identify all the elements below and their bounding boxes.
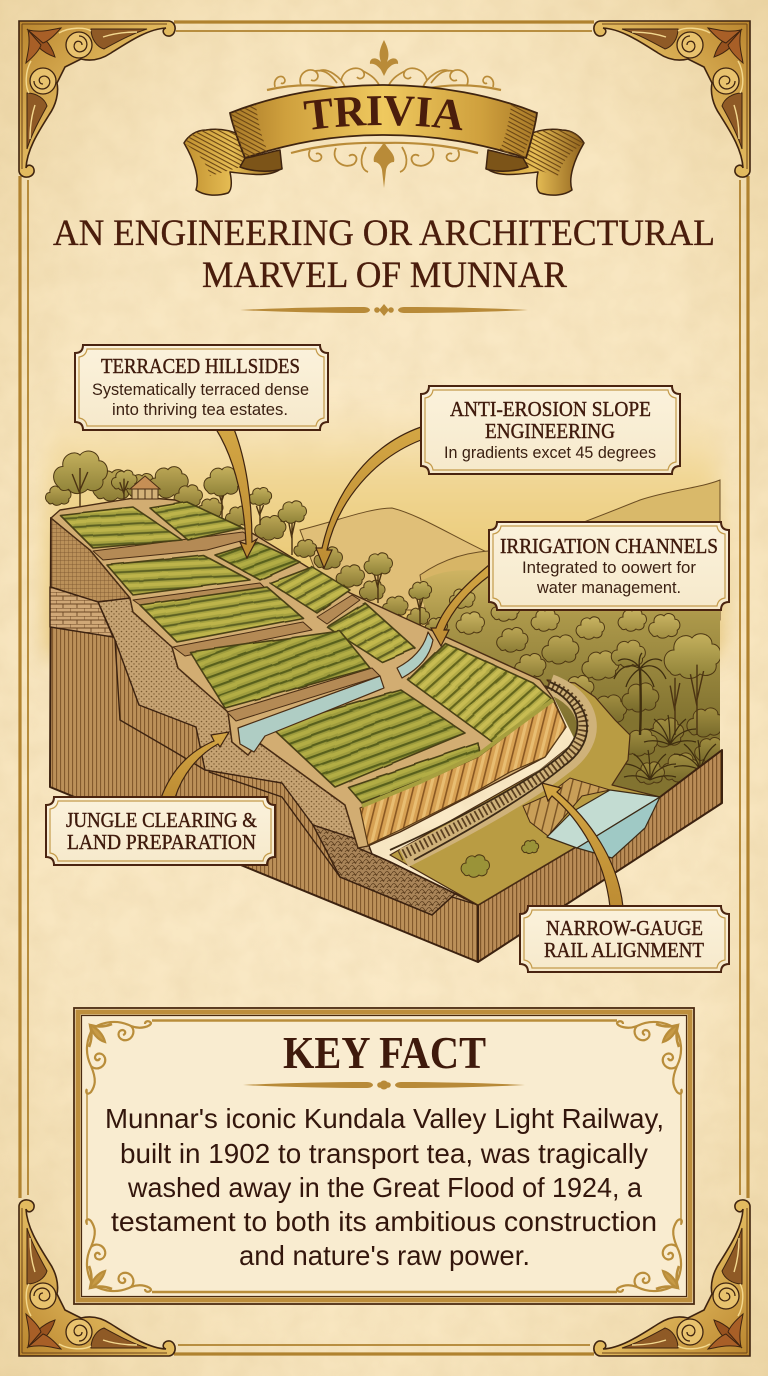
panel body text: washed away in the Great Flood of 1924, a: [127, 1172, 643, 1203]
arrow: to rail alignment: [542, 783, 623, 907]
soil layers: [50, 518, 478, 915]
panel divider: [243, 1080, 525, 1090]
left cut face of block: [50, 518, 478, 962]
pond bank: [523, 778, 610, 836]
callout: irrigation channels: water management.: [536, 578, 681, 597]
title: [53, 213, 715, 296]
callout: irrigation channels: IRRIGATION CHANNELS: [500, 534, 718, 558]
corner ornament: top right: [594, 21, 750, 177]
arrow: to irrigation channels: [431, 565, 489, 646]
callout: narrow-gauge rail alignment: [520, 906, 729, 972]
banner: TRIVIA ribbon: [183, 84, 585, 196]
flourish above banner: [267, 40, 501, 103]
callout: terraced hillsides: Systematically terraced dense: [92, 380, 309, 399]
title divider: [240, 304, 528, 316]
retaining walls: [93, 532, 380, 721]
callout: jungle clearing and land preparation: [46, 797, 275, 865]
sky: [48, 395, 720, 655]
panel body text: [105, 1103, 664, 1271]
callout: anti-erosion slope engineering: [421, 386, 680, 474]
callout: terraced hillsides: TERRACED HILLSIDES: [101, 354, 300, 378]
left ribbon tail: [184, 129, 282, 195]
corner ornament: top left: [19, 21, 175, 177]
hillside surface: [51, 497, 566, 848]
illustration: terraced hillside cross-section: [45, 395, 726, 962]
corner ornament: bottom right: [594, 1200, 750, 1356]
callout: narrow-gauge rail alignment: NARROW-GAUGE: [546, 916, 703, 940]
panel body text: testament to both its ambitious construction: [111, 1206, 657, 1237]
pond: [547, 790, 660, 858]
ridge canopy: [45, 451, 448, 635]
tall ridge trees: [217, 483, 227, 518]
title line 2: MARVEL OF MUNNAR: [202, 255, 567, 296]
distant hills: [300, 480, 720, 640]
narrow-gauge railway: [390, 682, 587, 860]
shrubs on front ground: [461, 840, 539, 877]
panel body text: Munnar's iconic Kundala Valley Light Railway,: [105, 1103, 664, 1134]
callout: anti-erosion slope engineering: ENGINEERING: [485, 419, 615, 443]
panel body text: built in 1902 to transport tea, was tragically: [120, 1138, 648, 1169]
callout: anti-erosion slope engineering: ANTI-EROSION SLOPE: [450, 397, 651, 421]
arrow: to jungle clearing: [161, 732, 229, 798]
panel body text: and nature's raw power.: [239, 1240, 530, 1271]
callout: narrow-gauge rail alignment: RAIL ALIGNMENT: [544, 938, 704, 962]
title line 1: AN ENGINEERING OR ARCHITECTURAL: [53, 213, 715, 254]
callout: irrigation channels: [489, 522, 729, 610]
arrow: to anti-erosion slope: [316, 427, 421, 568]
panel corner filigree: [86, 1021, 682, 1292]
callout: terraced hillsides: into thriving tea estates.: [112, 400, 288, 419]
hill bungalow: [130, 476, 160, 499]
ribbon band: [230, 85, 537, 158]
callout: anti-erosion slope engineering: In gradients excet 45 degrees: [444, 443, 656, 462]
corner ornament: bottom left: [19, 1200, 175, 1356]
panel: key fact: [74, 1008, 694, 1304]
front ground: [390, 680, 660, 905]
right cut face of block: [478, 750, 722, 962]
jungle valley: [415, 570, 726, 800]
eroded cliff: [360, 700, 566, 845]
callout: terraced hillsides: [75, 345, 328, 430]
right ribbon tail: [486, 129, 584, 195]
arrow: to terraced hillsides: [216, 429, 257, 558]
large left tree: [54, 451, 107, 494]
panel heading: KEY FACT: [283, 1027, 486, 1078]
grassy cliff edge: [362, 700, 553, 806]
callout: jungle clearing and land preparation: LAND PREPARATION: [67, 830, 256, 854]
tea terrace fields: [60, 502, 553, 803]
callout: jungle clearing and land preparation: JUNGLE CLEARING &: [66, 808, 257, 832]
irrigation channels: [238, 632, 433, 752]
banner title: TRIVIA: [303, 96, 462, 130]
flourish below banner: [291, 142, 478, 188]
panel frame: [74, 1008, 694, 1304]
callout: irrigation channels: Integrated to oowert for: [522, 558, 696, 577]
